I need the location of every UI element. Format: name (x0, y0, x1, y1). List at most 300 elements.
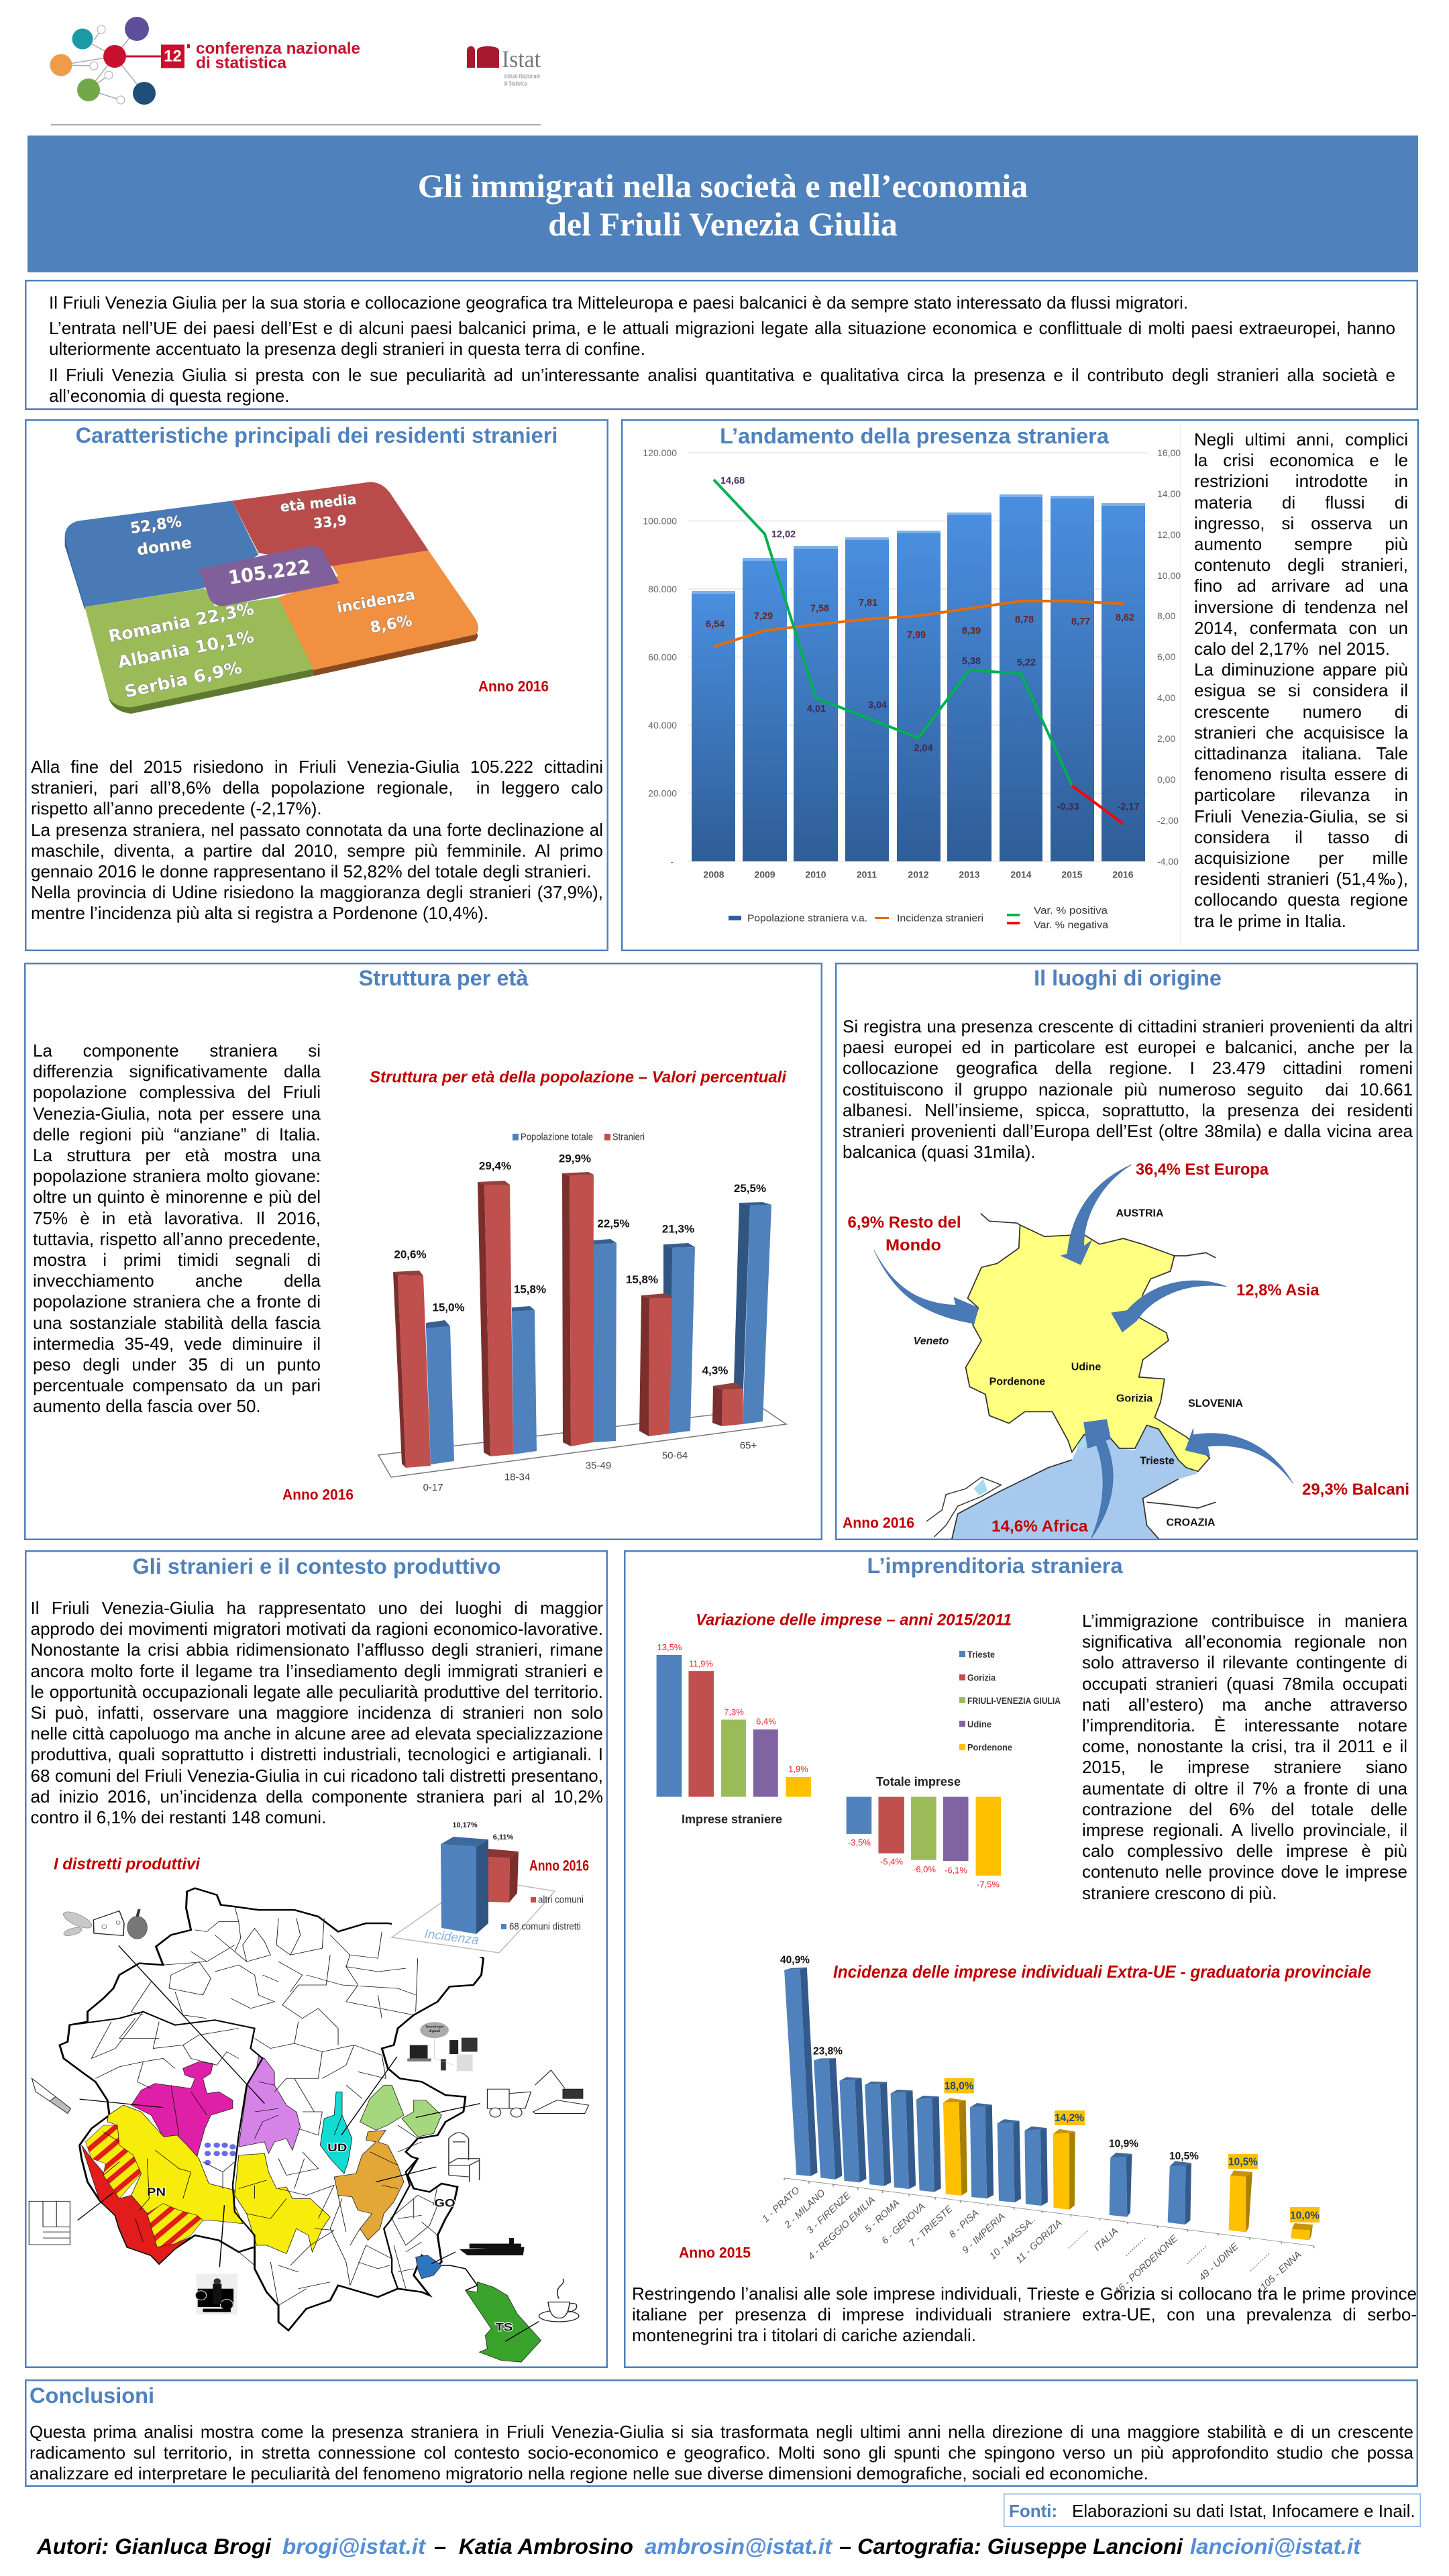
bar chart: imprese straniere e totale imprese: -7,5% (977, 1880, 1000, 1889)
chart title: variazione imprese: Variazione delle imprese – anni 2015/2011 (696, 1611, 1012, 1629)
intro text: all’economia di questa regione. (49, 386, 289, 406)
combo chart: population bars and lines: 2012 (908, 869, 929, 880)
logo: conferenza nazionale di statistica: conferenza nazionale (196, 40, 360, 58)
body text: invecchiamento anche della (33, 1271, 321, 1291)
icon: computers: digitali (429, 2029, 441, 2033)
body text: la crisi economica e le (1194, 450, 1408, 470)
chart legend: Stranieri (612, 1131, 645, 1143)
3D bar chart: incidenza (392, 1811, 593, 1957)
body text: bottom: italiane per presenza di imprese individuali straniere extra-UE, con una prevalenza di serbo- (632, 2304, 1417, 2324)
body text: right column: occupati stranieri (quasi 78mila occupati (1082, 1674, 1407, 1694)
conclusion text: radicamento sul territorio, in stretta connessione col contesto socio-economico e geografico. Molti sono gli spunti che spingono verso un più approfondito studio che possa (30, 2443, 1413, 2463)
3D bar chart: age structure: 29,4% (479, 1159, 511, 1173)
3D bar chart: provincial ranking: 46 - PORDENONE (1112, 2233, 1180, 2297)
chart legend: Udine (967, 1719, 991, 1729)
body text: nelle città capoluogo ma anche in alcune aree ad elevata specializzazione (31, 1723, 603, 1743)
body text: tra le prime in Italia. (1194, 911, 1346, 931)
icon: knife (32, 2078, 71, 2114)
combo chart: population bars and lines: 2016 (1112, 869, 1134, 880)
body text: contro il 6,1% dei restanti 148 comuni. (31, 1807, 326, 1827)
body text: oltre un quinto è minorenne e più del (33, 1187, 321, 1207)
body text: mostra i primi timidi segnali di (33, 1250, 321, 1270)
body text: Venezia-Giulia, nota per essere una (33, 1104, 321, 1124)
heading: Gli stranieri e il contesto produttivo (133, 1554, 500, 1578)
body text: 75% è in età lavorativa. Il 2016, (33, 1208, 321, 1228)
intro text (49, 292, 1395, 406)
province labels: PN (147, 2185, 166, 2198)
panel: conclusioni (25, 2379, 1418, 2487)
chart legend (501, 1894, 584, 1932)
combo chart: population bars and lines: 2011 (857, 869, 877, 880)
infographic tile: key figures: 52,8% (129, 513, 182, 537)
body text: balcanica (quasi 31mila). (843, 1142, 1036, 1162)
body text: right column: 2015, le imprese straniere siano (1082, 1757, 1407, 1777)
infographic tile: key figures: 33,9 (313, 512, 347, 532)
body text: restrizioni introdotte in (1194, 471, 1408, 491)
3D bar chart: provincial ranking: 8 - PISA (947, 2208, 981, 2241)
3D bar chart: provincial ranking: 6 - GENOVA (879, 2201, 927, 2247)
3D bar chart: provincial ranking: .......... (1121, 2232, 1148, 2258)
logo: conferenza nazionale di statistica: di statistica (196, 54, 287, 72)
body text: cittadinanza italiana. Tale (1194, 743, 1408, 763)
intro text: Il Friuli Venezia Giulia per la sua storia e collocazione geografica tra Mitteleuropa e paesi balcanici è da sempre stato interessato da flussi migratori. (49, 292, 1188, 313)
3D bar chart: provincial ranking: 105 - ENNA (1258, 2249, 1303, 2293)
infographic tile: key figures: Romania 22,3% (107, 599, 256, 646)
combo chart: population bars and lines: 100.000 (643, 515, 677, 526)
body text: percentuale compensato da un pari (33, 1375, 321, 1395)
3D bar chart: provincial ranking: 23,8% (813, 2046, 843, 2057)
map: Friuli Venezia Giulia with origin arrows: SLOVENIA (1188, 1398, 1243, 1409)
body text: right column: come, nonostante la crisi, tra il 2011 e il (1082, 1736, 1407, 1756)
body text: bottom: Restringendo l’analisi alle sole imprese individuali, Trieste e Gorizia si collocano tra le prime province (632, 2284, 1417, 2304)
body text: right column (1082, 1611, 1407, 1903)
conclusion text: Questa prima analisi mostra come la presenza straniera in Friuli Venezia-Giulia si sia trasformata negli ultimi anni nella direzione di una maggiore stabilità e di un crescente (30, 2422, 1413, 2442)
3D bar chart: age structure: 50-64 (662, 1450, 688, 1461)
body text: right column: L’immigrazione contribuisce in maniera (1082, 1611, 1407, 1631)
body text: ingresso, si osserva un (1194, 513, 1408, 533)
icon: chair (449, 2133, 480, 2182)
body text: contenuto degli stranieri, (1194, 555, 1408, 575)
3D bar chart: incidenza: 6,11% (493, 1833, 514, 1841)
panel: introduction (25, 280, 1418, 410)
year note: Anno 2016 (282, 1487, 354, 1503)
combo chart: population bars and lines: 10,00 (1157, 570, 1181, 581)
combo chart: population bars and lines: 16,00 (1157, 447, 1181, 458)
body text: right column: nati all’estero) ma anche attraverso (1082, 1695, 1407, 1715)
3D bar chart: provincial ranking: 10,9% (1109, 2139, 1138, 2149)
body text: Friuli Venezia-Giulia, se si (1194, 806, 1408, 826)
combo chart: population bars and lines: 6,00 (1157, 651, 1175, 662)
3D bar chart: provincial ranking (761, 1955, 1320, 2297)
map: Friuli Venezia Giulia with origin arrows: Gorizia (1116, 1393, 1152, 1405)
logo: Istat (467, 46, 541, 87)
icon: computers: Tecnologie (425, 2025, 444, 2029)
icon: ship (460, 2238, 525, 2255)
3D bar chart: age structure: 18-34 (504, 1472, 530, 1483)
chart legend (729, 905, 1109, 931)
map: distretti produttivi (29, 1888, 589, 2362)
panel: luoghi di origine (835, 963, 1418, 1540)
combo chart: population bars and lines: 8,39 (962, 626, 981, 637)
title banner (28, 136, 1418, 272)
3D bar chart: age structure: 25,5% (734, 1182, 766, 1195)
combo chart: population bars and lines: 0,00 (1157, 774, 1175, 785)
body text: Nonostante la crisi abbia ridimensionato l’afflusso degli stranieri, rimane (31, 1640, 603, 1660)
panel: struttura per età (24, 963, 822, 1540)
body text: fenomeno risulta essere di (1194, 764, 1408, 784)
map: Friuli Venezia Giulia with origin arrows (874, 1165, 1293, 1539)
body text: acquisizione per mille (1194, 848, 1408, 868)
body text: una sostanziale stabilità della fascia (33, 1313, 321, 1333)
3D bar chart: provincial ranking: 9 - IMPERIA (961, 2211, 1007, 2256)
3D bar chart: provincial ranking: 5 - ROMA (863, 2198, 902, 2235)
authors line: – Cartografia: Giuseppe Lancioni (839, 2534, 1183, 2559)
combo chart: population bars and lines: 40.000 (648, 720, 677, 731)
body text: right column: straniere crescono di più. (1082, 1883, 1277, 1903)
bar chart: imprese straniere e totale imprese: -5,4% (880, 1857, 903, 1866)
body text: right column: calo complessivo delle imprese è più (1082, 1841, 1407, 1861)
icon: fish cheese ham (60, 1909, 147, 1939)
body text: aumento sempre più (1194, 534, 1408, 554)
heading: Conclusioni (30, 2383, 154, 2408)
body text (33, 1040, 321, 1416)
body text: right column: l’imprenditoria. È interessante notare (1082, 1715, 1407, 1735)
body text: inversione di tendenza nel (1194, 597, 1408, 617)
combo chart: population bars and lines: 8,78 (1015, 614, 1034, 625)
combo chart: population bars and lines: 60.000 (648, 652, 677, 663)
chart legend: altri comuni (538, 1894, 584, 1905)
intro text: Il Friuli Venezia Giulia si presta con le sue peculiarità ad un’interessante analisi quantitativa e qualitativa circa la presenza e il contributo degli stranieri alla società e (49, 365, 1395, 385)
bar chart: imprese straniere e totale imprese: Imprese straniere (682, 1813, 782, 1826)
body text: La presenza straniera, nel passato connotata da una forte declinazione al (31, 820, 603, 840)
chart legend: Pordenone (967, 1742, 1012, 1753)
combo chart: population bars and lines: 12,00 (1157, 529, 1181, 540)
bar chart: imprese straniere e totale imprese: -6,1% (945, 1865, 967, 1876)
authors line: ambrosin@istat.it (645, 2534, 833, 2559)
body text: rispetto all’anno precedente (-2,17%). (31, 798, 322, 818)
combo chart: population bars and lines: 12,02 (771, 529, 796, 540)
body text: right column: contenuto nelle province dove le imprese (1082, 1862, 1407, 1882)
province labels (147, 2141, 513, 2333)
coloured districts (131, 2061, 233, 2157)
3D bar chart: provincial ranking: .......... (1245, 2247, 1272, 2273)
panel: stranieri e contesto produttivo (25, 1550, 608, 2368)
infographic tile: key figures: incidenza (335, 586, 417, 617)
icon: coffee (539, 2279, 579, 2322)
body text: ad inizio 2016, un’incidenza della componente straniera pari al 10,2% (31, 1786, 603, 1807)
body text: Alla fine del 2015 risiedono in Friuli Venezia-Giulia 105.222 cittadini (31, 757, 603, 777)
body text: stranieri che acquisisce la (1194, 722, 1408, 743)
body text: popolazione straniera molto giovane: (33, 1166, 321, 1186)
body text: differenzia significativamente dalla (33, 1061, 321, 1081)
3D bar chart: provincial ranking: 10,5% (1169, 2151, 1199, 2162)
authors line: Autori: Gianluca Brogi (36, 2534, 272, 2559)
combo chart: population bars and lines: -0,33 (1057, 802, 1079, 812)
combo chart: population bars and lines: 8,77 (1071, 616, 1090, 627)
3D bar chart: incidenza: Incidenza (423, 1927, 480, 1947)
bar chart: imprese straniere e totale imprese (657, 1642, 1001, 1889)
municipal borders (91, 1907, 437, 2306)
3D bar chart: provincial ranking: 7 - TRIESTE (907, 2204, 955, 2249)
combo chart: population bars and lines: 7,29 (754, 611, 773, 622)
body text: collocazione geografica della regione. I 23.479 cittadini romeni (843, 1058, 1413, 1078)
combo chart: population bars and lines: 2,04 (914, 743, 933, 754)
bar chart: imprese straniere e totale imprese: 1,9% (788, 1764, 808, 1774)
combo chart: population bars and lines: 20.000 (648, 788, 677, 798)
body text: paesi europei ed in particolare est europei e balcanici, anche per la (843, 1037, 1413, 1057)
map title: I distretti produttivi (54, 1856, 201, 1873)
chart legend: Popolazione straniera v.a. (747, 912, 867, 924)
3D bar chart: age structure: 15,0% (432, 1301, 465, 1313)
panel: caratteristiche principali (25, 419, 608, 951)
chart legend: Incidenza stranieri (897, 912, 983, 924)
infographic tile: key figures: età media (280, 491, 357, 515)
body text: residenti stranieri (51,4‰), (1194, 869, 1408, 889)
chart legend: Trieste (967, 1649, 995, 1660)
body text: ancora molto forte il legame tra l’insediamento degli immigrati stranieri e (31, 1661, 603, 1681)
combo chart: population bars and lines: 7,81 (859, 598, 877, 608)
3D bar chart: provincial ranking: 14,2% (1055, 2112, 1084, 2124)
body text: particolare rilevanza in (1194, 785, 1408, 805)
province labels: UD (327, 2141, 347, 2154)
chart legend (513, 1131, 645, 1143)
3D bar chart: provincial ranking: 4 - REGGIO EMILIA (806, 2195, 877, 2262)
infographic tile: key figures: Albania 10,1% (116, 627, 256, 672)
combo chart: population bars and lines: 3,04 (868, 700, 887, 711)
chart legend: FRIULI-VENEZIA GIULIA (967, 1695, 1061, 1706)
body text: albanesi. Nell’insieme, spicca, soprattutto, la presenza dei residenti (843, 1100, 1413, 1120)
combo chart: population bars and lines: - (670, 856, 674, 867)
body text: 68 comuni del Friuli Venezia-Giulia in cui ricadono tali distretti presentano, (31, 1766, 603, 1786)
chart legend: Var. % positiva (1034, 905, 1108, 916)
map: Friuli Venezia Giulia with origin arrows: Veneto (914, 1336, 949, 1347)
panel: imprenditoria straniera (624, 1550, 1418, 2368)
3D bar chart: provincial ranking: .......... (1182, 2240, 1209, 2266)
body text: delle regioni più “anziane” di Italia. (33, 1124, 321, 1144)
title banner: Gli immigrati nella società e nell’economia (418, 167, 1028, 205)
chart legend: Popolazione totale (521, 1131, 593, 1143)
body text (843, 1016, 1413, 1162)
sources box: Elaborazioni su dati Istat, Infocamere e Inail. (1072, 2501, 1415, 2521)
logo: Istat: Istat (502, 46, 541, 72)
combo chart: population bars and lines: 14,68 (720, 476, 745, 486)
bar chart: imprese straniere e totale imprese: 11,9% (689, 1658, 713, 1669)
body text: right column: aumentate di oltre il 7% a fronte di una (1082, 1778, 1407, 1799)
3D bar chart: provincial ranking: 18,0% (945, 2081, 974, 2092)
3D bar chart: provincial ranking: ITALIA (1092, 2226, 1120, 2253)
combo chart: population bars and lines: 2015 (1061, 869, 1083, 880)
chart title: Struttura per età della popolazione – Valori percentuali (370, 1068, 787, 1087)
body text: right column: contrazione del 6% del totale delle (1082, 1799, 1407, 1819)
body text (31, 1598, 603, 1827)
body text: bottom (632, 2284, 1417, 2345)
3D bar chart: age structure: 29,9% (559, 1152, 591, 1165)
3D bar chart: provincial ranking: 3 - FIRENZE (805, 2190, 853, 2236)
body text: Nella provincia di Udine risiedono la maggioranza degli stranieri (37,9%), (31, 882, 603, 902)
body text: intermedia 35-49, vede diminuire il (33, 1334, 321, 1354)
body text: gennaio 2016 le donne rappresentano il 52,82% del totale degli stranieri. (31, 861, 592, 881)
title banner: del Friuli Venezia Giulia (548, 205, 898, 243)
bar chart: imprese straniere e totale imprese: Totale imprese (876, 1775, 961, 1788)
logo: conferenza nazionale di statistica (50, 17, 360, 105)
year note: Anno 2016 (478, 678, 549, 695)
3D bar chart: age structure: 35-49 (586, 1460, 611, 1472)
body text: Si può, infatti, osservare una maggiore incidenza di stranieri non solo (31, 1703, 603, 1723)
intro text: L’entrata nell’UE dei paesi dell’Est e di alcuni paesi balcanici prima, e le attuali migrazioni legate alla situazione economica e conflittuale di molti paesi extraeuropei, hanno (49, 318, 1395, 338)
icon: computers (407, 2022, 478, 2071)
body text: fino ad arrivare ad una (1194, 576, 1408, 596)
body text: La struttura per età mostra una (33, 1145, 321, 1165)
body text: 2014, confermata con un (1194, 618, 1408, 638)
body text: esigua se si considera il (1194, 680, 1408, 700)
conclusion text: analizzare ed interpretare le peculiarità del fenomeno migratorio nella regione nelle sue diverse dimensioni demografiche, sociali ed economiche. (30, 2463, 1148, 2483)
body text: bottom: montenegrini tra i titolari di cariche aziendali. (632, 2325, 976, 2345)
map: Friuli Venezia Giulia with origin arrows: Udine (1071, 1362, 1101, 1373)
body text: le opportunità occupazionali legate alle peculiarità produttive del territorio. (31, 1682, 603, 1702)
chart legend: 68 comuni distretti (509, 1921, 581, 1932)
3D bar chart: age structure (378, 1152, 786, 1493)
infographic tile: key figures (65, 482, 478, 714)
label: Africa: 14,6% Africa (991, 1517, 1088, 1536)
combo chart: population bars and lines: 5,22 (1017, 657, 1036, 668)
combo chart: population bars and lines: 2009 (754, 869, 775, 880)
map: Friuli Venezia Giulia with origin arrows: CROAZIA (1167, 1517, 1216, 1528)
map: Friuli Venezia Giulia with origin arrows: Trieste (1140, 1456, 1175, 1466)
combo chart: population bars and lines: 7,58 (810, 604, 829, 614)
combo chart: population bars and lines: 5,38 (962, 656, 981, 667)
body text: Il Friuli Venezia-Giulia ha rappresentato uno dei luoghi di maggior (31, 1598, 603, 1618)
icon: truck and excavator (487, 2070, 589, 2117)
label: Resto del Mondo: Mondo (885, 1236, 941, 1254)
label: Resto del Mondo: 6,9% Resto del (848, 1214, 961, 1232)
authors line: – (434, 2534, 446, 2559)
3D bar chart: provincial ranking: 49 - UDINE (1197, 2241, 1241, 2283)
infographic tile: key figures: 8,6% (369, 612, 413, 637)
3D bar chart: provincial ranking: 40,9% (780, 1955, 810, 1966)
body text (1194, 429, 1408, 931)
bar chart: imprese straniere e totale imprese: 7,3% (724, 1707, 744, 1717)
heading: Caratteristiche principali dei residenti stranieri (76, 423, 557, 447)
province borders (70, 2012, 418, 2289)
combo chart: population bars and lines: 80.000 (648, 584, 677, 594)
map: Friuli Venezia Giulia with origin arrows: Pordenone (989, 1377, 1045, 1387)
label: Balcani: 29,3% Balcani (1302, 1481, 1409, 1499)
authors line: brogi@istat.it (282, 2534, 426, 2559)
body text: stranieri, pari all’8,6% della popolazione regionale, in leggero calo (31, 777, 603, 798)
callout lines (78, 1945, 539, 2341)
label: Est Europa: 36,4% Est Europa (1136, 1161, 1269, 1179)
combo chart: population bars and lines: 2010 (805, 869, 826, 880)
sources box: Fonti: (1009, 2501, 1057, 2521)
body text: stranieri provenienti dall’Europa dell’Est (oltre 38mila) e dalla vicina area (843, 1121, 1413, 1141)
combo chart: population bars and lines: 6,54 (706, 619, 724, 630)
logo: conferenza nazionale di statistica: 12 (164, 47, 182, 66)
year note: Anno 2015 (679, 2245, 751, 2261)
authors line (36, 2534, 1361, 2559)
body text: mentre l’incidenza più alta si registra a Pordenone (10,4%). (31, 903, 488, 923)
body text: crescente numero di (1194, 702, 1408, 722)
body text (31, 757, 603, 923)
3D bar chart: age structure: 15,8% (514, 1283, 546, 1296)
chart legend: Var. % negativa (1034, 919, 1109, 931)
province labels: GO (434, 2196, 455, 2209)
3D bar chart: provincial ranking: .......... (1063, 2224, 1090, 2251)
panel: andamento della presenza straniera (621, 419, 1419, 951)
combo chart: population bars and lines (643, 447, 1181, 880)
3D bar chart: incidenza: 10,17% (452, 1821, 478, 1829)
year note: Anno 2016 (529, 1857, 589, 1874)
conclusion text (30, 2422, 1413, 2483)
combo chart: population bars and lines: 8,00 (1157, 610, 1175, 621)
bar chart: imprese straniere e totale imprese: 13,5% (657, 1642, 682, 1652)
combo chart: population bars and lines: 120.000 (643, 447, 677, 458)
body text: popolazione complessiva del Friuli (33, 1082, 321, 1102)
3D bar chart: provincial ranking: 10 - MASSA.. (987, 2214, 1038, 2262)
combo chart: population bars and lines: 8,62 (1116, 612, 1134, 623)
combo chart: population bars and lines: -2,00 (1157, 815, 1179, 826)
label: Resto del Mondo (848, 1214, 961, 1254)
body text: calo del 2,17% nel 2015. (1194, 639, 1390, 659)
body text: right column: imprese regionali. A livello provinciale, il (1082, 1820, 1407, 1840)
body text: right column: solo attraverso il rilevante contingente di (1082, 1652, 1407, 1672)
body text: maschile, diventa, a partire dal 2010, sempre più femminile. Al primo (31, 841, 603, 861)
3D bar chart: provincial ranking: 11 - GORIZIA (1014, 2218, 1064, 2266)
3D bar chart: age structure: 4,3% (702, 1364, 728, 1377)
3D bar chart: age structure: 65+ (740, 1440, 757, 1452)
heading: L’andamento della presenza straniera (720, 424, 1109, 448)
3D bar chart: provincial ranking: 1 - PRATO (761, 2185, 802, 2224)
3D bar chart: provincial ranking: 10,5% (1228, 2156, 1258, 2168)
body text: Negli ultimi anni, complici (1194, 429, 1408, 449)
body text: considera il tasso di (1194, 827, 1408, 847)
province labels: TS (495, 2320, 513, 2333)
combo chart: population bars and lines: 4,01 (807, 704, 826, 714)
combo chart: population bars and lines: 2,00 (1157, 733, 1175, 744)
infographic tile: key figures: Serbia 6,9% (123, 657, 244, 702)
infographic tile: key figures: donne (136, 534, 193, 559)
body text: approdo dei movimenti migratori motivati da ragioni economico-lavorative. (31, 1619, 603, 1639)
3D bar chart: age structure: 21,3% (662, 1222, 694, 1236)
intro text: ulteriormente accentuato la presenza degli stranieri in questa terra di confine. (49, 339, 645, 359)
icon: wardrobe (29, 2201, 70, 2245)
body text: La diminuzione appare più (1194, 659, 1408, 680)
body text: tuttavia, rispetto all’anno precedente, (33, 1229, 321, 1249)
heading: Struttura per età (359, 966, 528, 990)
combo chart: population bars and lines: 2014 (1010, 869, 1032, 880)
combo chart: population bars and lines: 14,00 (1157, 488, 1181, 499)
bar chart: imprese straniere e totale imprese: -6,0% (913, 1864, 936, 1874)
combo chart: population bars and lines: 2013 (959, 869, 980, 880)
3D bar chart: age structure: 15,8% (626, 1273, 658, 1286)
body text: La componente straniera si (33, 1040, 321, 1061)
body text: Si registra una presenza crescente di cittadini stranieri provenienti da altri (843, 1016, 1413, 1036)
body text: produttiva, quali soprattutto i distretti industriali, tecnologici e artigianali. I (31, 1744, 603, 1764)
body text: right column: significativa all’economia regionale non (1082, 1631, 1407, 1652)
authors line: Katia Ambrosino (459, 2534, 633, 2559)
combo chart: population bars and lines: -2,17 (1117, 802, 1140, 812)
body text: peso degli under 35 di un punto (33, 1354, 321, 1375)
body text: costituiscono il gruppo nazionale più numeroso seguito dai 10.661 (843, 1079, 1413, 1099)
body text: materia di flussi di (1194, 492, 1408, 513)
body text: popolazione straniera che a fronte di (33, 1291, 321, 1311)
combo chart: population bars and lines: -4,00 (1157, 856, 1179, 867)
map: Friuli Venezia Giulia with origin arrows: AUSTRIA (1116, 1208, 1164, 1220)
authors line: lancioni@istat.it (1190, 2534, 1361, 2559)
body text: aumento della fascia over 50. (33, 1396, 261, 1416)
combo chart: population bars and lines: 2008 (703, 869, 724, 880)
3D bar chart: provincial ranking: 2 - MILANO (782, 2188, 827, 2231)
logo: Istat: Istituto Nazionale (504, 72, 540, 79)
